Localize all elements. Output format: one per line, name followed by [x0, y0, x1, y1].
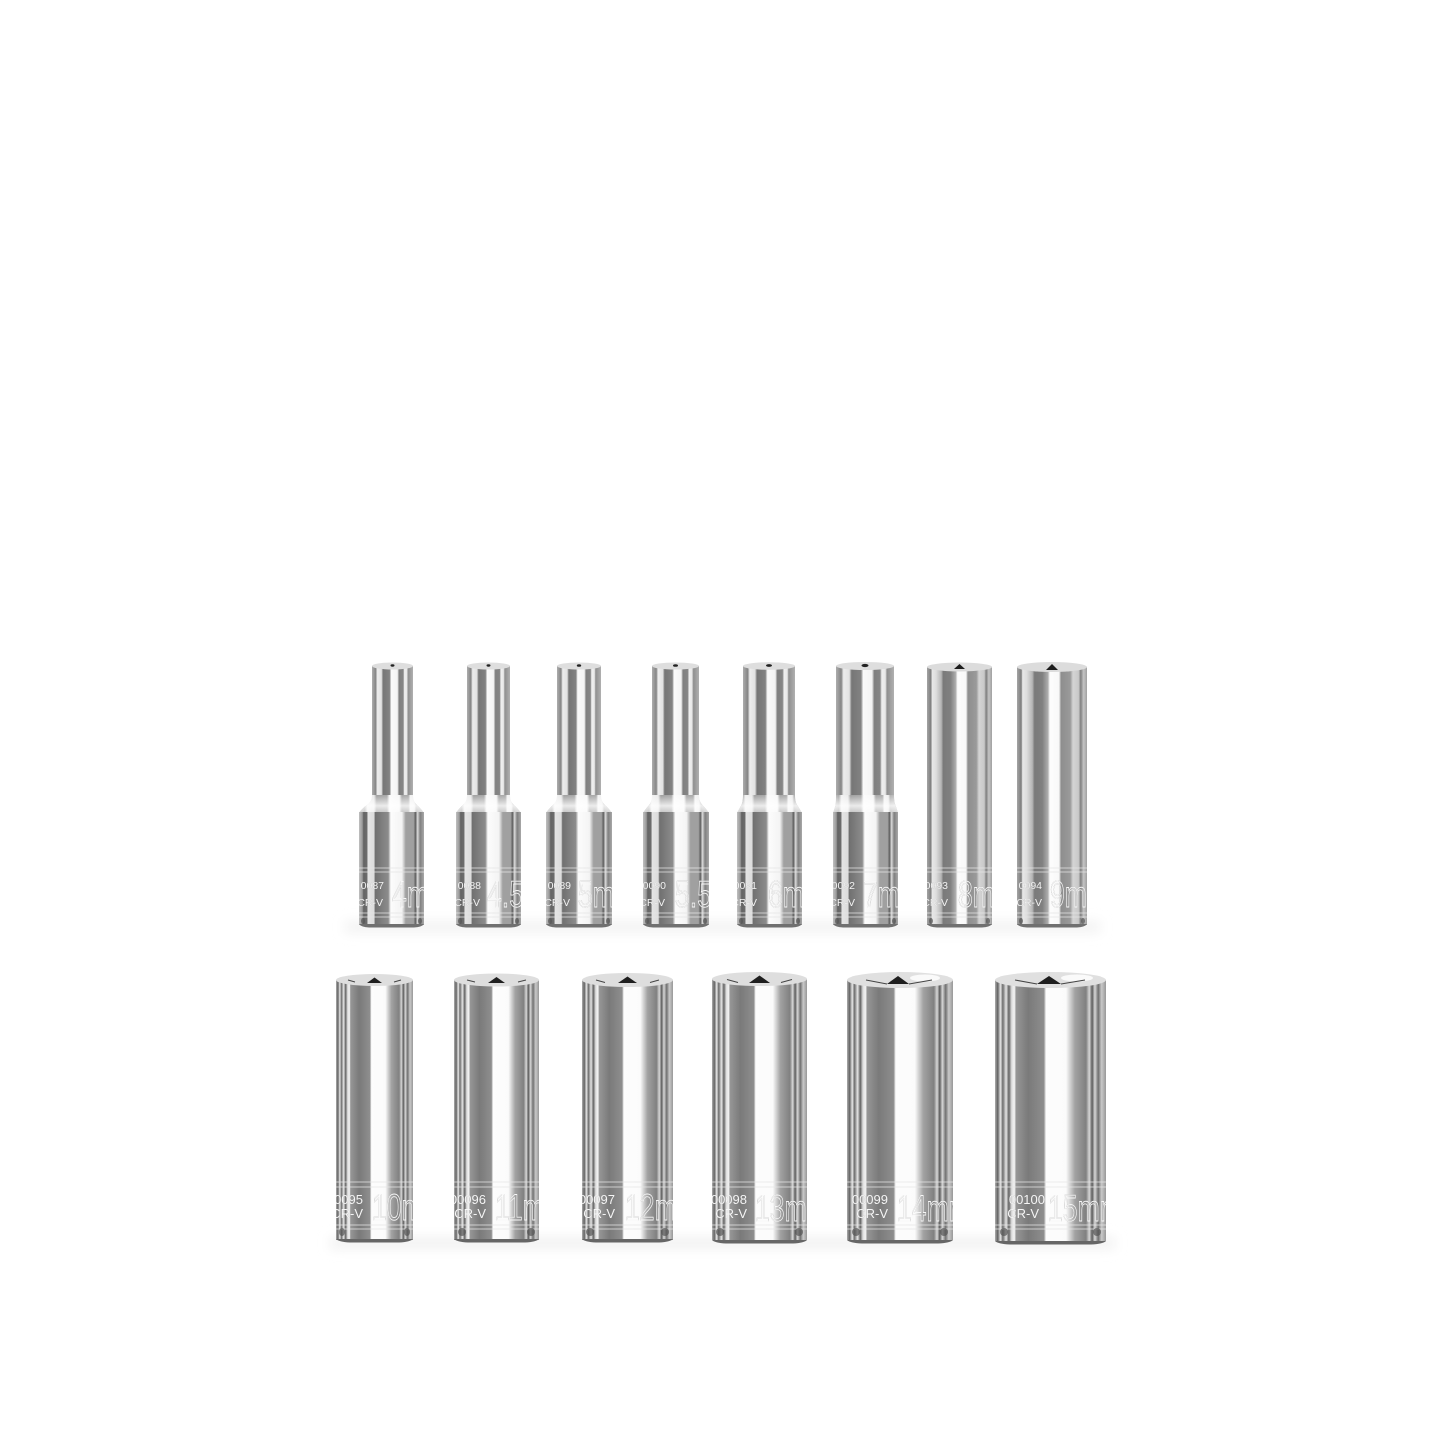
- engraving: 4mm: 4mm: [392, 874, 451, 915]
- socket 4mm: [359, 662, 424, 928]
- engraving: 7mm: 7mm: [863, 874, 922, 915]
- engraving: 14mm: [852, 1195, 953, 1222]
- engraving: 11mm: 00096: [450, 1192, 486, 1207]
- engraving: 7mm: [833, 881, 898, 908]
- socket 7mm: [833, 662, 898, 928]
- socket 10mm: [336, 974, 413, 1242]
- engraving: 14mm: 14mm: [897, 1188, 971, 1229]
- floor shadow: bottom row: [330, 1238, 1115, 1248]
- engraving: 10mm: 10mm: [372, 1187, 446, 1228]
- engraving: 7mm: 0092: [832, 880, 855, 892]
- socket 11mm: [454, 974, 539, 1242]
- engraving: 6mm: 6mm: [768, 874, 827, 915]
- socket 4.5mm: [456, 662, 521, 928]
- socket 5.5mm: [643, 662, 709, 928]
- engraving: 6mm: [737, 880, 802, 908]
- engraving: 4.5mm: CR-V: [454, 897, 480, 909]
- engraving: 14mm: CR-V: [856, 1206, 888, 1221]
- engraving: 5mm: 5mm: [578, 874, 637, 915]
- engraving: 10mm: 00095: [327, 1192, 363, 1207]
- engraving: 8mm: CR-V: [922, 897, 948, 909]
- socket 13mm: [712, 972, 807, 1244]
- engraving: 6mm: CR-V: [731, 897, 757, 909]
- engraving: 4mm: [359, 881, 424, 908]
- engraving: 5.5mm: CR-V: [639, 897, 665, 909]
- socket 15mm: [995, 972, 1106, 1244]
- socket 9mm: [1017, 662, 1087, 928]
- engraving: 5mm: 0089: [548, 880, 571, 892]
- engraving: 4mm: CR-V: [357, 897, 383, 909]
- engraving: 9mm: [1017, 880, 1086, 908]
- engraving: 4.5mm: 0088: [458, 880, 481, 892]
- floor shadow: top row: [345, 922, 1100, 932]
- engraving: 9mm: 9mm: [1050, 874, 1109, 915]
- engraving: 8mm: 0093: [925, 880, 948, 892]
- engraving: 11mm: 11mm: [495, 1187, 567, 1228]
- engraving: 8mm: [927, 880, 992, 908]
- engraving: 5mm: CR-V: [544, 897, 570, 909]
- engraving: 4.5mm: 4.5mm: [487, 874, 568, 915]
- engraving: 6mm: 0091: [734, 880, 757, 892]
- engraving: 7mm: CR-V: [829, 897, 855, 909]
- engraving: 5.5mm: 5.5mm: [675, 874, 756, 915]
- engraving: 15mm: CR-V: [1007, 1206, 1039, 1221]
- socket 8mm: [927, 662, 992, 928]
- engraving: 4mm: 0087: [361, 880, 384, 892]
- engraving: 13mm: CR-V: [715, 1206, 747, 1221]
- engraving: 15mm: [1008, 1194, 1106, 1222]
- engraving: 15mm: 00100: [1009, 1192, 1045, 1207]
- socket 6mm: [737, 662, 802, 928]
- engraving: 10mm: CR-V: [331, 1206, 363, 1221]
- engraving: 12mm: 12mm: [625, 1187, 699, 1228]
- engraving: 11mm: [454, 1194, 539, 1220]
- socket 14mm: [847, 972, 953, 1244]
- engraving: 13mm: 00098: [711, 1192, 747, 1207]
- engraving: 9mm: 0094: [1019, 880, 1042, 892]
- socket set illustration: [336, 662, 1108, 1246]
- socket 5mm: [546, 662, 612, 928]
- engraving: 5.5mm: 0090: [643, 880, 666, 892]
- engraving: 8mm: 8mm: [958, 874, 1017, 915]
- socket 12mm: [582, 973, 673, 1242]
- engraving: 12mm: CR-V: [583, 1206, 615, 1221]
- engraving: 11mm: CR-V: [454, 1206, 486, 1221]
- engraving: 10mm: [336, 1194, 413, 1221]
- engraving: 14mm: 00099: [852, 1192, 888, 1207]
- engraving: 12mm: [582, 1194, 673, 1220]
- engraving: 5.5mm: [643, 880, 709, 908]
- engraving: 15mm: 15mm: [1048, 1188, 1122, 1229]
- engraving: 13mm: 13mm: [755, 1188, 829, 1229]
- engraving: 5mm: [546, 880, 612, 908]
- engraving: 9mm: CR-V: [1016, 897, 1042, 909]
- engraving: 4.5mm: [456, 880, 521, 908]
- engraving: 13mm: [712, 1194, 806, 1222]
- engraving: 12mm: 00097: [579, 1192, 615, 1207]
